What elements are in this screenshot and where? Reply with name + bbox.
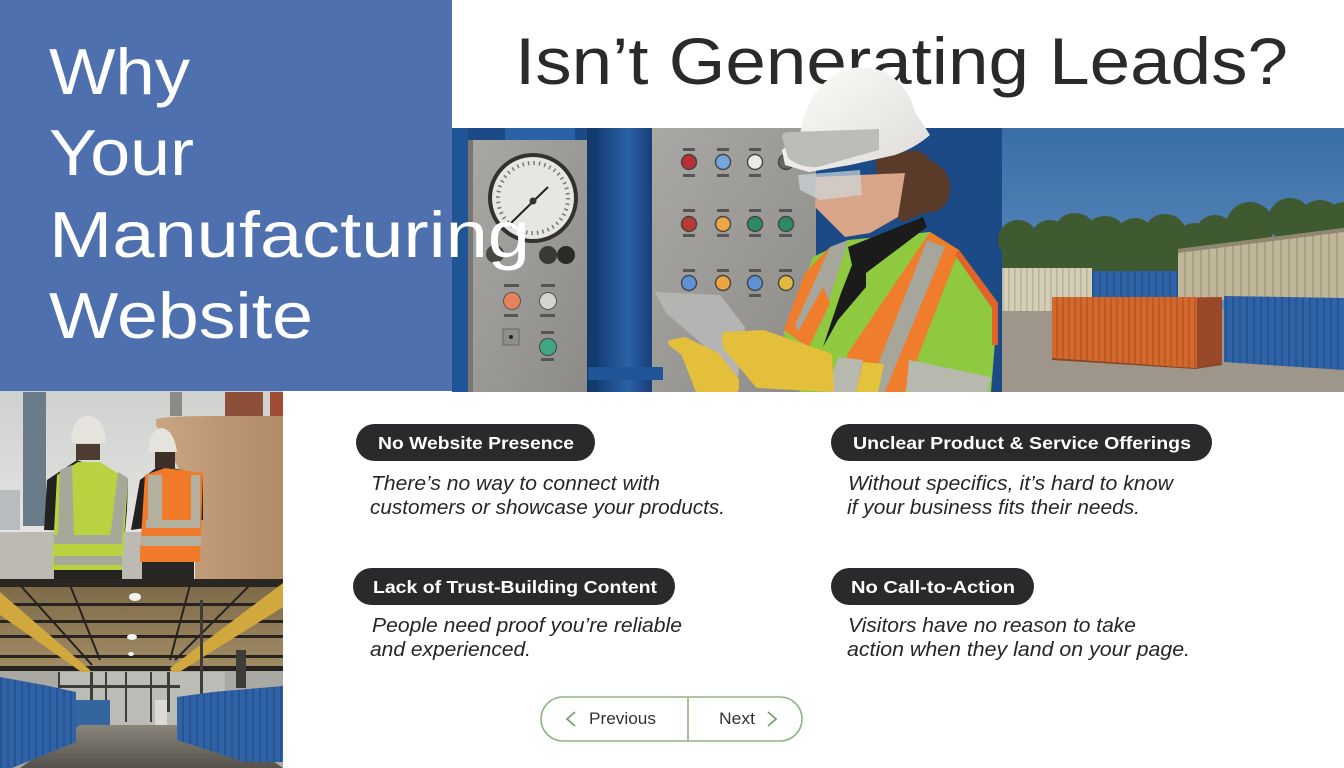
pill: No Website Presence: [356, 424, 595, 461]
black collar: [823, 217, 927, 347]
text: trust description: and experienced.: [370, 639, 531, 661]
text: unclear offerings description: if your business fits their needs.: [847, 497, 1140, 519]
yellow roof beams: [0, 583, 283, 678]
text: call to action description: [847, 615, 1190, 661]
goggles: [782, 129, 879, 167]
title: Why Your Manufacturing Website: Why: [49, 35, 191, 108]
pill: No Website Presence: No Website Presence: [378, 433, 574, 453]
title: Why Your Manufacturing Website: Manufacturing: [49, 198, 530, 271]
hair and bun: [875, 150, 950, 222]
pill: Lack of Trust-Building Content: Lack of Trust-Building Content: [373, 577, 657, 597]
pill: No Call-to-Action: No Call-to-Action: [851, 577, 1015, 597]
helmet: [782, 67, 930, 172]
lamps: [127, 593, 141, 656]
worker one: [44, 416, 128, 579]
orange and grey vest stripes: [784, 232, 998, 392]
tablet: [655, 292, 745, 377]
pill: Unclear Product and Service Offerings: [831, 424, 1212, 461]
text: call to action description: Visitors have no reason to take: [848, 615, 1136, 637]
gloves: [671, 333, 831, 389]
text: no website description: [370, 473, 725, 519]
text: no website description: There’s no way to connect with: [371, 473, 660, 495]
title: Why Your Manufacturing Website: [49, 35, 530, 352]
label: previous: Previous: [589, 709, 656, 728]
knobs on gauge plate: [486, 245, 575, 264]
icon: pressure gauge: [488, 153, 578, 243]
left plate buttons: [503, 284, 556, 361]
jacket: [784, 232, 998, 392]
blue bins left: [0, 677, 76, 768]
text: unclear offerings description: [847, 473, 1175, 519]
title: Why Your Manufacturing Website: Your: [49, 116, 194, 189]
panel: blue title block: [0, 0, 452, 391]
title: Why Your Manufacturing Website: Website: [49, 279, 313, 352]
photo: shipping containers yard: [998, 128, 1344, 392]
text: unclear offerings description: Without specifics, it’s hard to know: [848, 473, 1175, 495]
text: trust description: [370, 615, 682, 661]
icon: previous chevron: [567, 712, 575, 726]
photo: control panel backdrop: [452, 128, 1002, 392]
text: trust description: People need proof you’re reliable: [372, 615, 682, 637]
photo: two workers in vests from behind: [0, 391, 283, 579]
photo: warehouse interior with blue bins: [0, 579, 283, 768]
safety glasses: [798, 170, 862, 200]
back wall and racks: [58, 600, 246, 750]
heading: Isn't Generating Leads: Isn’t Generating Leads?: [515, 24, 1288, 98]
right plate buttons: [682, 148, 794, 297]
text: no website description: customers or showcase your products.: [370, 497, 725, 519]
face: [815, 173, 905, 237]
text: call to action description: action when they land on your page.: [847, 639, 1190, 661]
worker two: [131, 428, 203, 579]
pill: Unclear Product and Service Offerings: Unclear Product & Service Offerings: [853, 433, 1191, 453]
pill: No Call-to-Action: [831, 568, 1034, 605]
icon: next chevron: [768, 712, 776, 726]
photo: worker with hard hat and tablet: [655, 67, 998, 392]
label: next: Next: [719, 709, 755, 728]
blue bins right: [177, 686, 283, 762]
navigation buttons: [541, 697, 802, 741]
pill: Lack of Trust-Building Content: [353, 568, 675, 605]
